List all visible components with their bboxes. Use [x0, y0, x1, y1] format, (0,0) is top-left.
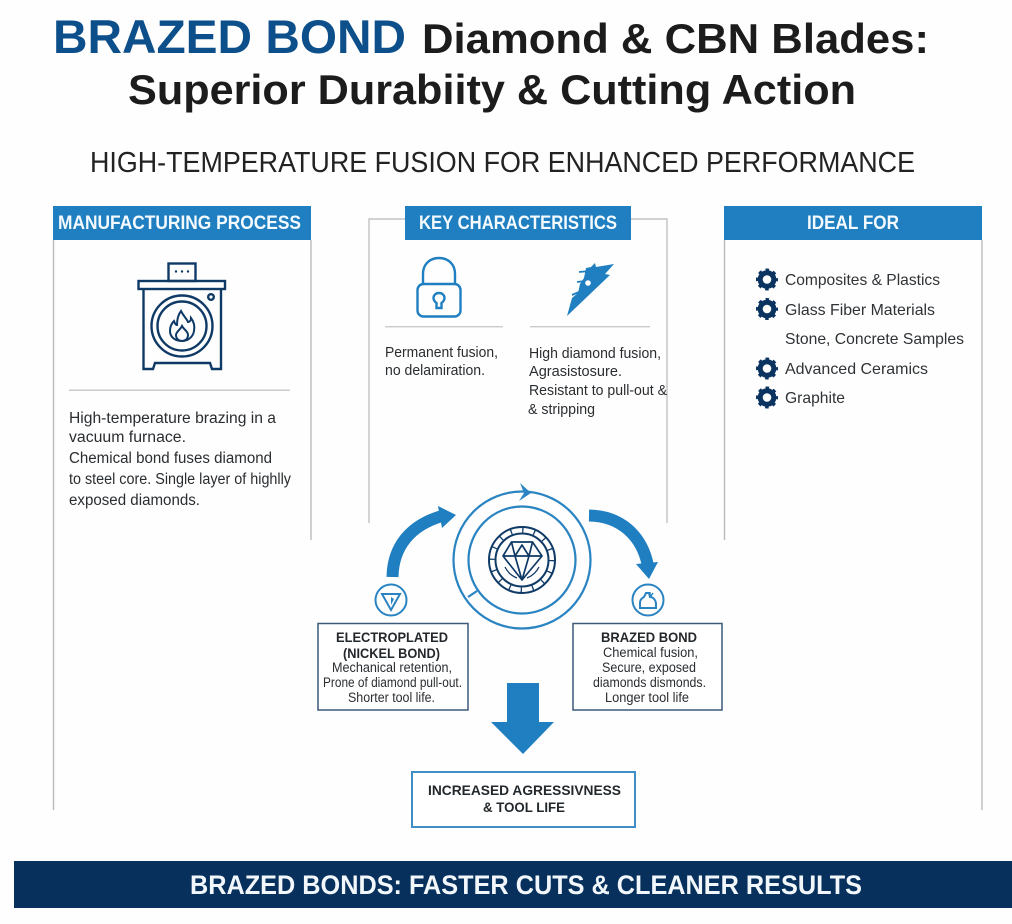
title: [53, 10, 929, 113]
box: brazed bond: Chemical fusion,: [603, 645, 698, 660]
box: result: INCREASED AGRESSIVNESS: [428, 782, 621, 798]
subtitle: HIGH-TEMPERATURE FUSION FOR ENHANCED PERFORMANCE: [90, 147, 915, 179]
materials list: Advanced Ceramics: [785, 361, 928, 378]
arrow: curved left: [392, 506, 456, 577]
key characteristics heading: KEY CHARACTERISTICS: [419, 212, 617, 234]
ideal for heading: IDEAL FOR: [807, 212, 899, 234]
characteristic: permanent fusion: Permanent fusion,: [385, 345, 498, 361]
icon: electroplated triangle: [376, 584, 406, 616]
manufacturing process text: Chemical bond fuses diamond: [69, 450, 272, 467]
box: brazed bond: [573, 624, 722, 710]
icon: diamond medallion: [489, 527, 555, 593]
icon: brazed bond: [632, 584, 664, 616]
manufacturing process text: [69, 410, 291, 509]
icon: gear: [758, 300, 776, 318]
icon: gear: [758, 359, 776, 378]
characteristic: high diamond fusion: Agrasistosure.: [529, 364, 622, 380]
box: electroplated nickel bond: Shorter tool life.: [348, 690, 435, 705]
panel: key characteristics: [369, 206, 667, 523]
manufacturing process text: exposed diamonds.: [69, 492, 200, 509]
icon: padlock: [418, 258, 460, 316]
title: Superior Durabiity & Cutting Action: [128, 66, 856, 113]
characteristic: high diamond fusion: & stripping: [528, 402, 595, 418]
materials list: Stone, Concrete Samples: [785, 331, 964, 348]
characteristic: high diamond fusion: High diamond fusion,: [529, 346, 661, 362]
materials list: Glass Fiber Materials: [785, 302, 935, 319]
arrow: down: [491, 683, 554, 754]
box: result: [412, 772, 635, 827]
manufacturing process text: to steel core. Single layer of highlly: [69, 471, 291, 488]
characteristic: permanent fusion: [385, 345, 498, 379]
diagram: central diamond rings: [454, 483, 590, 628]
icon: furnace with flame: [138, 264, 225, 369]
materials list: [785, 272, 964, 407]
manufacturing process text: High-temperature brazing in a: [69, 410, 276, 427]
manufacturing process heading: [53, 206, 311, 240]
box: brazed bond: Longer tool life: [605, 690, 689, 705]
icon: lightning bolt: [567, 263, 614, 316]
panel: ideal for: [724, 206, 982, 810]
title: BRAZED BOND: [53, 10, 406, 63]
characteristic: high diamond fusion: Resistant to pull-out &: [529, 383, 667, 399]
materials list: Composites & Plastics: [785, 272, 940, 289]
box: result: & TOOL LIFE: [483, 799, 565, 815]
materials list: Graphite: [785, 390, 845, 407]
manufacturing process text: vacuum furnace.: [69, 429, 186, 446]
box: electroplated nickel bond: Prone of diamond pull-out.: [323, 675, 462, 690]
icon: gear: [758, 388, 776, 407]
panel: manufacturing process: [53, 206, 311, 810]
box: brazed bond: diamonds dismonds.: [593, 675, 706, 690]
arrow: curved right: [589, 516, 658, 579]
box: electroplated nickel bond: Mechanical retention,: [332, 660, 452, 675]
footer banner: BRAZED BONDS: FASTER CUTS & CLEANER RESULTS: [190, 870, 862, 900]
box: brazed bond: BRAZED BOND: [601, 629, 697, 645]
key characteristics heading: [405, 206, 631, 240]
characteristic: permanent fusion: no delamiration.: [385, 363, 485, 379]
icon: gear: [758, 270, 776, 289]
characteristic: high diamond fusion: [528, 346, 667, 418]
box: electroplated nickel bond: (NICKEL BOND): [343, 645, 440, 661]
title: Diamond & CBN Blades:: [422, 15, 929, 62]
box: electroplated nickel bond: ELECTROPLATED: [336, 629, 448, 645]
box: brazed bond: Secure, exposed: [602, 660, 696, 675]
ideal for heading: [724, 206, 982, 240]
box: electroplated nickel bond: [318, 624, 468, 710]
manufacturing process heading: MANUFACTURING PROCESS: [58, 212, 301, 234]
footer banner: [14, 861, 1012, 908]
